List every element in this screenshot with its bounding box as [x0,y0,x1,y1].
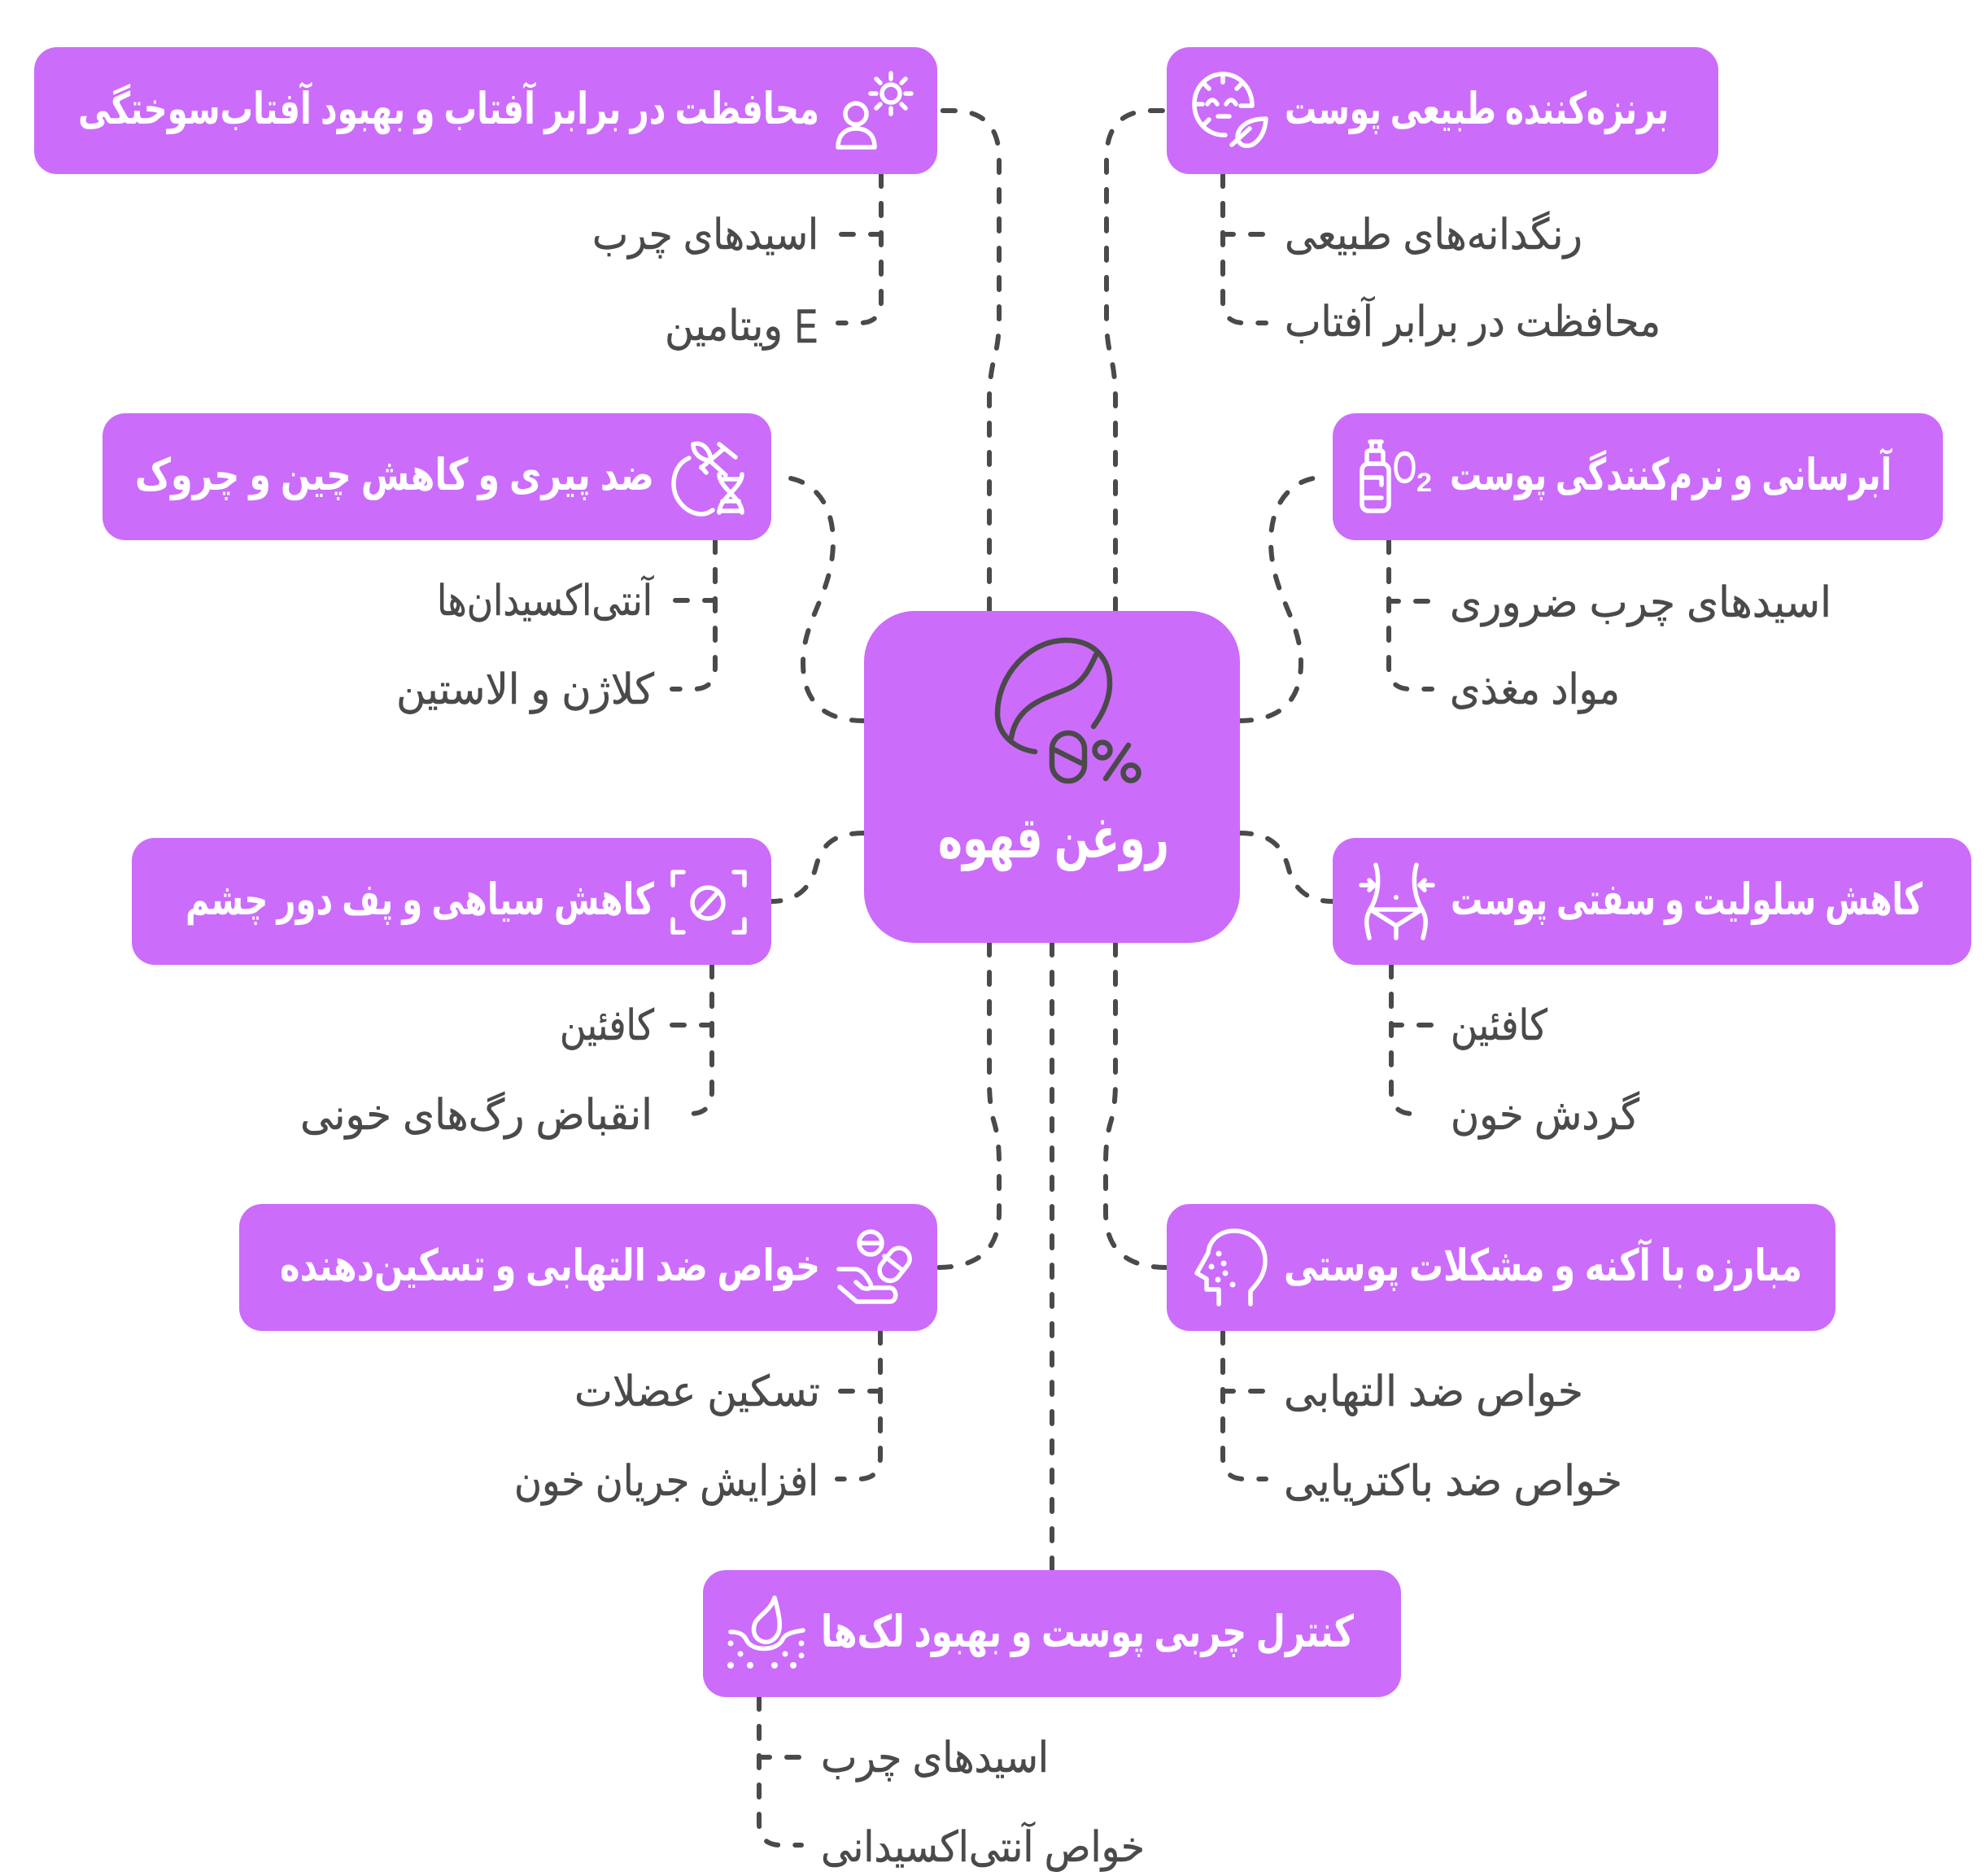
panel: acne [1167,1204,1835,1506]
icon: oxygen bottle: 2 [1416,468,1432,497]
item: sun protection: محافظت در برابر آفتاب [1285,295,1661,347]
sub-branch connectors [1223,174,1266,323]
title: coffee oil: روغن قهوه [938,806,1169,871]
item: collagen and elastin: کلاژن و الاستین [396,666,654,714]
main connectors from centre to topics [771,111,1333,1570]
heading: محافظت در برابر آفتاب و بهبود آفتاب‌سوختگی [78,81,819,134]
panel: oil control [703,1570,1401,1872]
heading: کاهش سیاهی و پف دور چشم [186,875,654,925]
icon: coffee bean with zero percent [997,640,1139,781]
icon: sun and person [838,73,911,147]
item: caffeine: کافئین [560,1002,654,1050]
sub-branch connectors [837,1331,880,1479]
item: vitamin E: E [795,300,818,353]
panel: natural bronzer [1167,47,1718,347]
panel: dark circles [132,838,771,1140]
icon: apple and DNA [674,443,742,514]
item: muscle relaxation: تسکین عضلات [574,1368,820,1416]
item: anti-inflammatory properties: خواص ضد التهابی [1284,1368,1583,1416]
icon: face with leaf [1194,74,1266,146]
sub-branch connectors [672,540,715,689]
item: increased blood flow: افزایش جریان خون [514,1458,818,1506]
icon: target with no symbol [673,872,744,932]
item: antioxidant properties: خواص آنتی‌اکسیدانی [821,1821,1145,1872]
icon: hand with pills [839,1232,914,1302]
sub-branch connectors [1389,540,1432,689]
item: vitamin E: ویتامین [665,303,783,351]
heading: برنزه‌کننده طبیعی پوست [1285,85,1669,134]
panel: anti-aging [103,413,771,714]
icon: oil drop on skin [727,1598,804,1669]
panel: hydration [1333,413,1943,714]
item: antioxidants: آنتی‌اکسیدان‌ها [437,574,654,625]
item: fatty acids: اسیدهای چرب [592,212,818,260]
item: natural pigments: رنگدانه‌های طبیعی [1285,211,1582,260]
sub-branch connectors [1223,1331,1267,1479]
heading: مبارزه با آکنه و مشکلات پوستی [1284,1238,1802,1291]
panel: anti-inflammatory [239,1204,937,1506]
item: caffeine: کافئین [1451,1002,1547,1050]
item: antibacterial properties: خواص ضد باکتریایی [1284,1458,1622,1506]
item: blood circulation: گردش خون [1451,1091,1639,1140]
icon: oxygen bottle: O [1393,443,1416,492]
item: essential fatty acids: اسیدهای چرب ضروری [1450,579,1831,627]
item: nutrients: مواد مغذی [1450,666,1620,714]
heading: کنترل چربی پوست و بهبود لک‌ها [821,1608,1354,1657]
item: fatty acids: اسیدهای چرب [821,1734,1049,1782]
sub-branch connectors [838,174,881,323]
heading: خواص ضد التهابی و تسکین‌دهنده [280,1241,820,1292]
sub-branch connectors [759,1697,802,1845]
icon: head with acne dots [1197,1231,1265,1304]
panel: cellulite [1333,838,1971,1140]
icon: waist with arrows [1361,865,1433,938]
panel: sun protection [34,47,937,353]
panel: centre node coffee oil [864,611,1240,943]
heading: ضد پیری و کاهش چین و چروک [135,451,654,500]
sub-branch connectors [1391,965,1435,1114]
item: vasoconstriction: انقباض رگ‌های خونی [300,1091,653,1140]
sub-branch connectors [670,965,712,1114]
icon: oxygen bottle [1362,442,1432,511]
